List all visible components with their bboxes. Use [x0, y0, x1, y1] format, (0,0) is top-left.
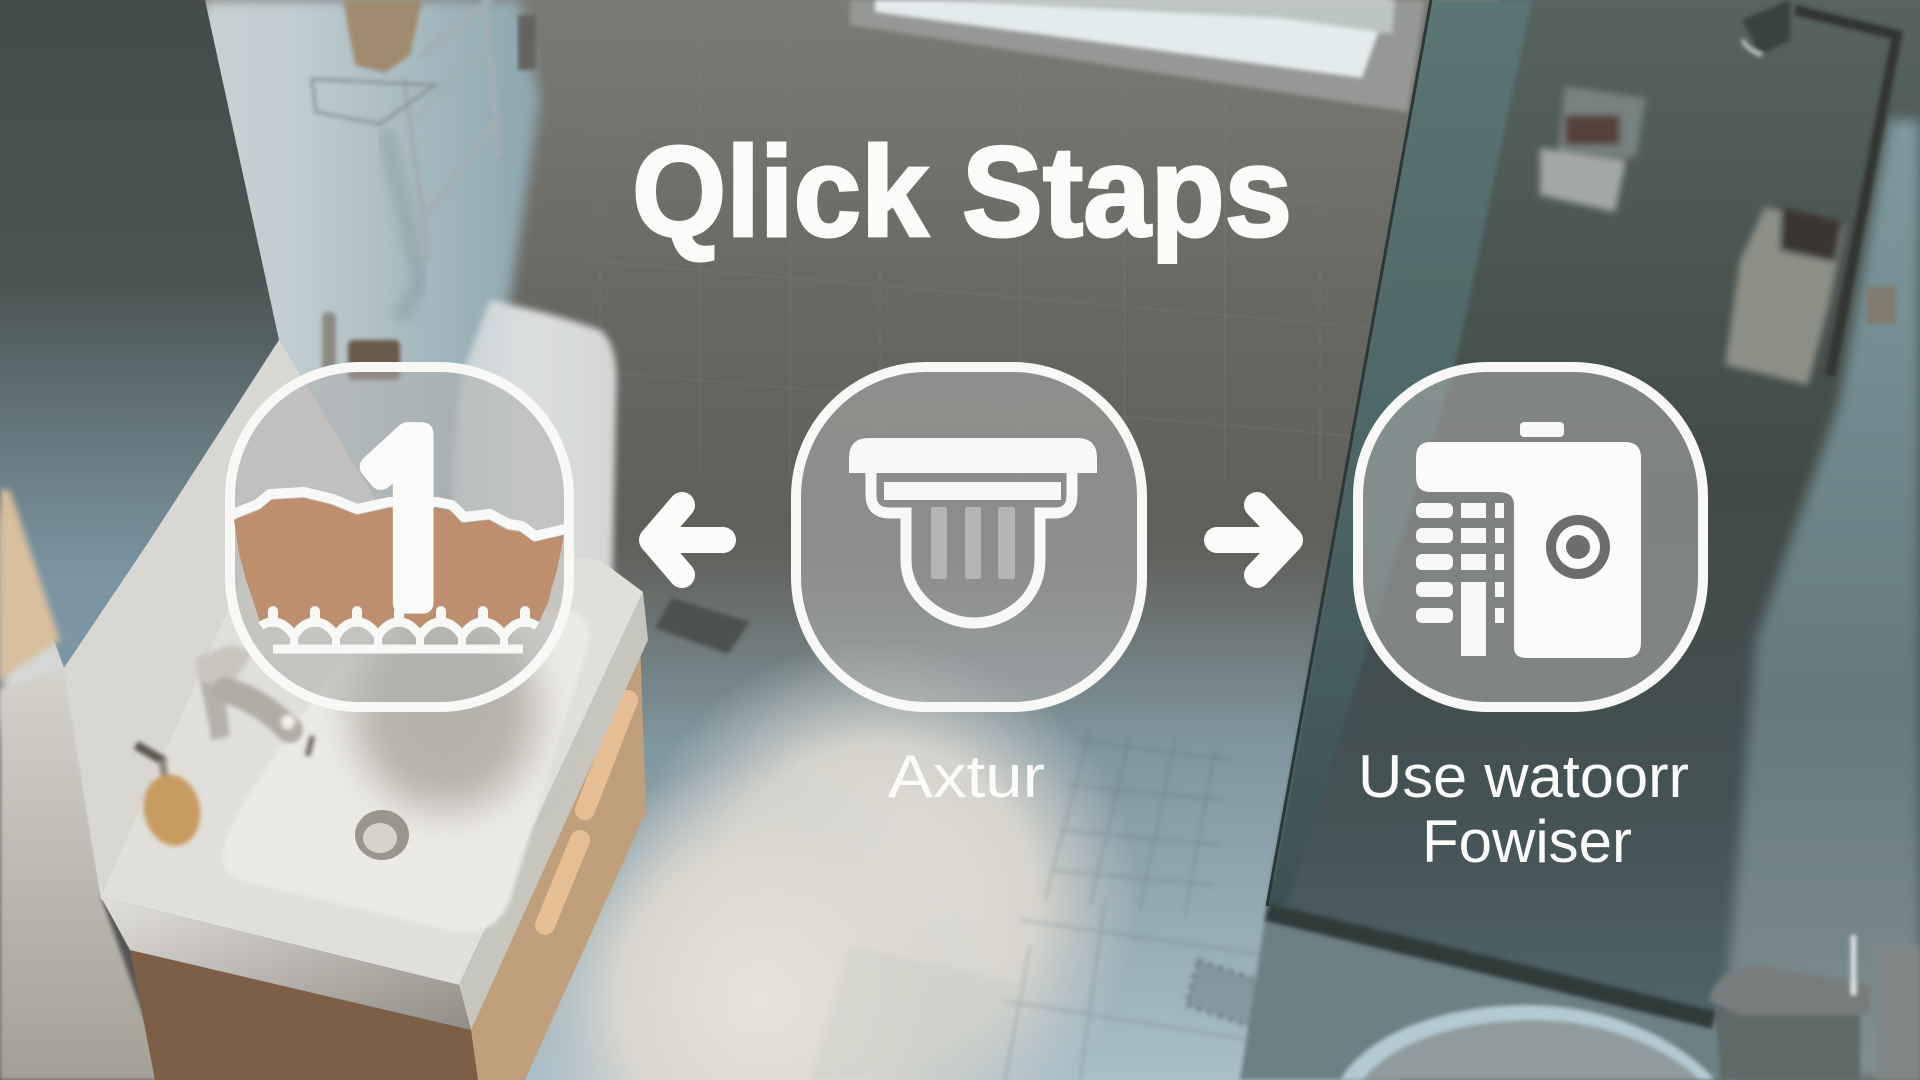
counter top — [101, 540, 643, 985]
counter right edge — [459, 592, 648, 1030]
mirror — [0, 0, 279, 668]
hanging towel — [1725, 207, 1845, 385]
glass panel — [1267, 0, 1532, 906]
icon: drain bar — [884, 482, 1061, 500]
arrow right — [1217, 505, 1290, 575]
bowl bottom right — [1340, 1005, 1715, 1080]
mosaic floor tile — [1186, 960, 1272, 1030]
icon: drain cap — [849, 438, 1097, 473]
icon: device body — [1416, 442, 1641, 658]
panel: step 3 — [1358, 367, 1703, 707]
title: Qlick Staps — [632, 121, 1292, 264]
icon: drain body — [871, 473, 1072, 623]
faucet — [196, 645, 316, 757]
sponge — [343, 0, 422, 73]
label: step 2: Axtur — [888, 743, 1045, 810]
lower left wall — [0, 668, 168, 1080]
toilet tank — [440, 300, 617, 640]
arrow left — [652, 505, 723, 575]
glass base frame — [1267, 912, 1714, 1020]
bright light patch on floor — [520, 640, 1140, 1080]
label: step 3 second line: Fowiser — [1422, 808, 1632, 875]
counter front — [101, 897, 471, 1030]
towel rail — [312, 0, 499, 259]
icon: drain slots — [931, 507, 1015, 579]
right wall — [1720, 120, 1920, 1080]
paper holder — [322, 312, 400, 380]
window frame highlight — [875, 0, 1390, 78]
glass edge — [1267, 0, 1431, 906]
panel frame 3 — [1358, 367, 1703, 707]
floor tile grid — [1000, 730, 1265, 1080]
icon: brown mound — [234, 498, 564, 636]
shower head — [1742, 0, 1790, 55]
basin shadow — [353, 610, 537, 810]
basin — [223, 610, 589, 932]
panel frame 1 — [230, 367, 569, 707]
cabinet side — [471, 640, 646, 1080]
back wall — [0, 0, 1500, 620]
window sill — [850, 0, 1425, 112]
number one: 1 — [338, 412, 478, 640]
rail bracket — [518, 15, 536, 70]
tile wall left — [0, 0, 540, 900]
label: step 3: Use watoorr — [1358, 743, 1689, 810]
ledge — [64, 340, 400, 900]
cabinet front — [130, 950, 480, 1080]
rail shadow — [385, 130, 420, 320]
icon: dial — [1546, 515, 1610, 579]
drawer handle — [545, 700, 628, 925]
window glass — [925, 0, 1395, 34]
drain — [355, 810, 409, 860]
shower interior — [1267, 0, 1920, 1080]
shower clip — [1866, 286, 1896, 324]
soap holder — [1540, 86, 1646, 212]
dotted floor tile — [810, 945, 1020, 1080]
mound outline — [233, 492, 565, 536]
floor — [500, 500, 1400, 1080]
sediment comb — [261, 611, 537, 649]
wall tile lines — [580, 20, 1400, 480]
icon: button grid — [1416, 503, 1504, 656]
shower floor outside glass — [1240, 906, 1740, 1080]
tap bottom right — [1708, 935, 1920, 1080]
floor mat — [655, 598, 750, 654]
icon: top pill — [1520, 422, 1564, 437]
panel: step 1 — [230, 367, 569, 707]
warm mirror glow — [0, 490, 60, 680]
soap dish — [136, 745, 207, 851]
shower arm and pipe — [1795, 10, 1897, 376]
panel frame 2 — [796, 367, 1142, 707]
panel: step 2 — [796, 367, 1142, 707]
